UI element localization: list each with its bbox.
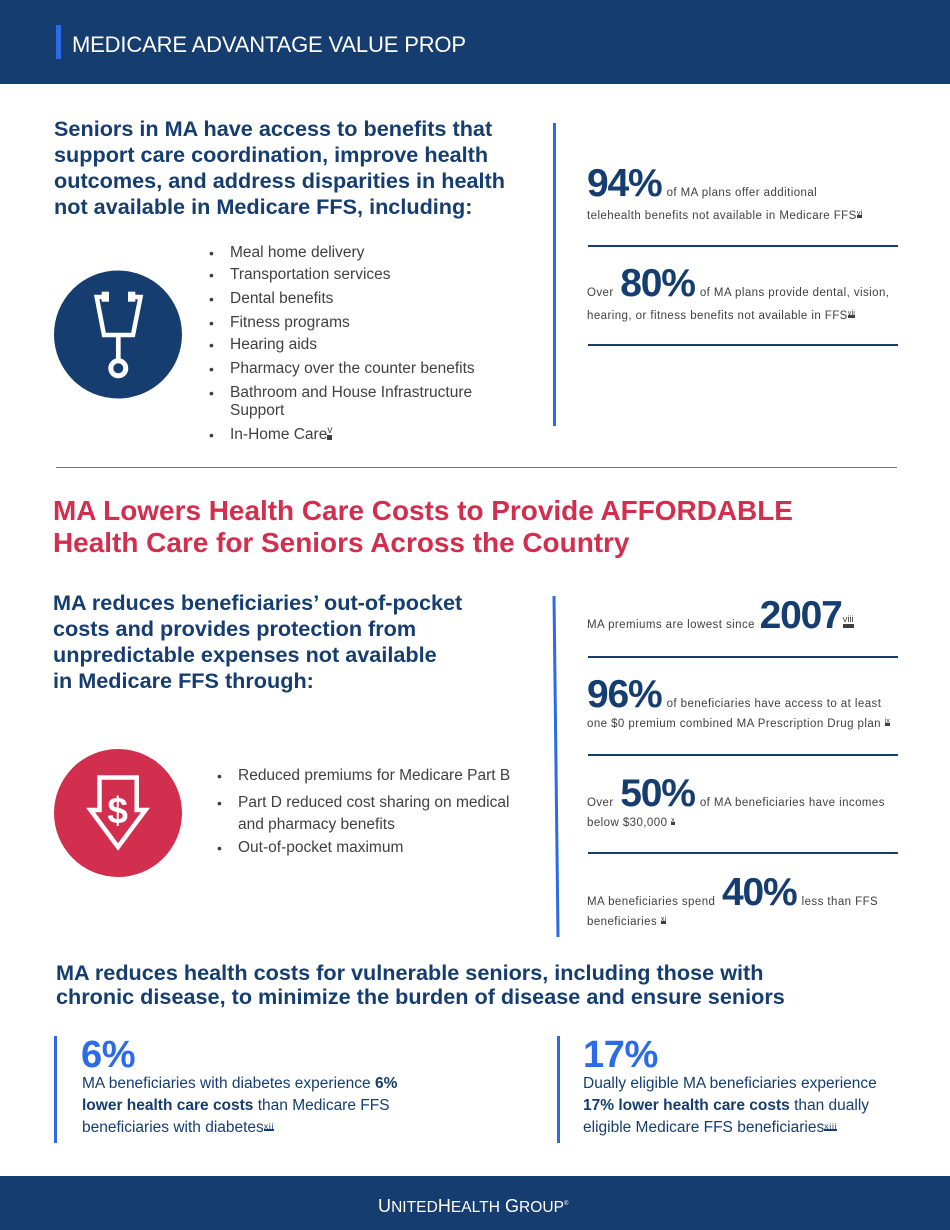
list: cost protections: Reduced premiums for Medicare Part B [238, 767, 510, 784]
callout text: MA beneficiaries with diabetes experience 6% [82, 1075, 397, 1092]
heading: seniors benefits [54, 116, 505, 219]
list: MA benefits [210, 244, 475, 443]
heading: affordable care: Health Care for Seniors Across the Country [53, 527, 629, 558]
callout: 17 percent dually eligible [557, 1034, 877, 1143]
list: MA benefits: Support [230, 402, 284, 419]
list: MA benefits: Dental benefits [230, 290, 333, 307]
icon: dollar down arrow: $ [107, 790, 128, 831]
heading: affordable care [53, 495, 793, 558]
heading: out-of-pocket: unpredictable expenses not available [53, 642, 437, 667]
callout bar [557, 1036, 560, 1143]
list: cost protections: and pharmacy benefits [238, 816, 395, 833]
stat: 94 percent telehealth: 94% of MA plans offer additional [587, 162, 817, 205]
list: cost protections [218, 767, 510, 856]
heading: out-of-pocket [53, 590, 462, 693]
list: MA benefits: Hearing aids [230, 336, 317, 353]
list: cost protections: Out-of-pocket maximum [238, 839, 403, 856]
callout text: Dually eligible MA beneficiaries experience [583, 1075, 877, 1092]
callout: 6 percent diabetes [54, 1034, 397, 1143]
heading: vulnerable seniors: MA reduces health costs for vulnerable seniors, including those with [56, 960, 763, 985]
header banner [0, 0, 950, 84]
stat: 96 percent: ix [885, 716, 890, 725]
callout text [583, 1075, 877, 1136]
heading: seniors benefits: Seniors in MA have access to benefits that [54, 116, 492, 141]
footer banner [0, 1176, 950, 1230]
callout text: 17% lower health care costs than dually [583, 1097, 869, 1114]
callout bar [54, 1036, 57, 1143]
heading: seniors benefits: outcomes, and address disparities in health [54, 168, 505, 193]
callout text: beneficiaries with diabetes [82, 1119, 264, 1136]
list: MA benefits: In-Home Care [230, 426, 327, 443]
stat: 96 percent: one $0 premium combined MA Prescription Drug plan [587, 718, 881, 730]
logo wordmark: UNITEDHEALTH GROUP® [378, 1196, 569, 1216]
stat: 40 percent: beneficiaries [587, 916, 657, 928]
list: MA benefits: Transportation services [230, 266, 391, 283]
heading: affordable care: MA Lowers Health Care Costs to Provide AFFORDABLE [53, 495, 793, 526]
stat: lowest since 2007: MA premiums are lowest since 2007 [587, 594, 842, 637]
divider: vertical blue upper [553, 123, 556, 426]
stat: lowest since 2007: viii [843, 614, 854, 625]
header accent bar [56, 25, 61, 59]
stat: over 80 percent: Over 80% of MA plans provide dental, vision, [587, 262, 889, 305]
stat: 40 percent: MA beneficiaries spend 40% less than FFS [587, 871, 878, 914]
list: MA benefits: v [327, 425, 332, 436]
heading: vulnerable seniors: chronic disease, to minimize the burden of disease and ensure seniors [56, 984, 785, 1009]
list: MA benefits: Meal home delivery [230, 244, 364, 261]
icon: dollar down arrow [54, 749, 182, 877]
stat: 94 percent telehealth: vi [857, 208, 862, 217]
stat: over 80 percent: vii [848, 308, 855, 317]
heading: seniors benefits: support care coordination, improve health [54, 142, 488, 167]
list: MA benefits: Bathroom and House Infrastructure [230, 384, 472, 401]
icon: stethoscope [54, 270, 182, 398]
stat: 96 percent: 96% of beneficiaries have access to at least [587, 673, 881, 716]
callout number: 17% [583, 1034, 658, 1076]
stat: 94 percent telehealth: telehealth benefits not available in Medicare FFS [587, 210, 857, 222]
callout text [82, 1075, 397, 1136]
list: MA benefits: Pharmacy over the counter benefits [230, 360, 475, 377]
callout text: xii [264, 1120, 274, 1130]
callout text: lower health care costs than Medicare FFS [82, 1097, 390, 1114]
heading: vulnerable seniors [56, 960, 785, 1009]
stat: over 80 percent: hearing, or fitness benefits not available in FFS [587, 310, 848, 322]
callout number: 6% [81, 1034, 135, 1076]
heading: out-of-pocket: costs and provides protection from [53, 616, 416, 641]
heading: out-of-pocket: in Medicare FFS through: [53, 668, 314, 693]
stat: over 50 percent: x [671, 815, 675, 824]
callout text: xiii [824, 1120, 837, 1130]
section divider [56, 467, 897, 468]
heading: out-of-pocket: MA reduces beneficiaries’ out-of-pocket [53, 590, 462, 615]
stat: over 50 percent: Over 50% of MA beneficiaries have incomes [587, 772, 885, 815]
divider: vertical blue lower [552, 596, 560, 937]
stat: 94 percent telehealth [587, 162, 862, 222]
callout text: eligible Medicare FFS beneficiaries [583, 1119, 824, 1136]
stat: over 50 percent: below $30,000 [587, 817, 667, 829]
list: cost protections: Part D reduced cost sharing on medical [238, 794, 509, 811]
heading: seniors benefits: not available in Medicare FFS, including: [54, 194, 472, 219]
stat: 40 percent: xi [661, 914, 666, 923]
list: MA benefits: Fitness programs [230, 314, 350, 331]
page title: MEDICARE ADVANTAGE VALUE PROP [72, 32, 466, 57]
